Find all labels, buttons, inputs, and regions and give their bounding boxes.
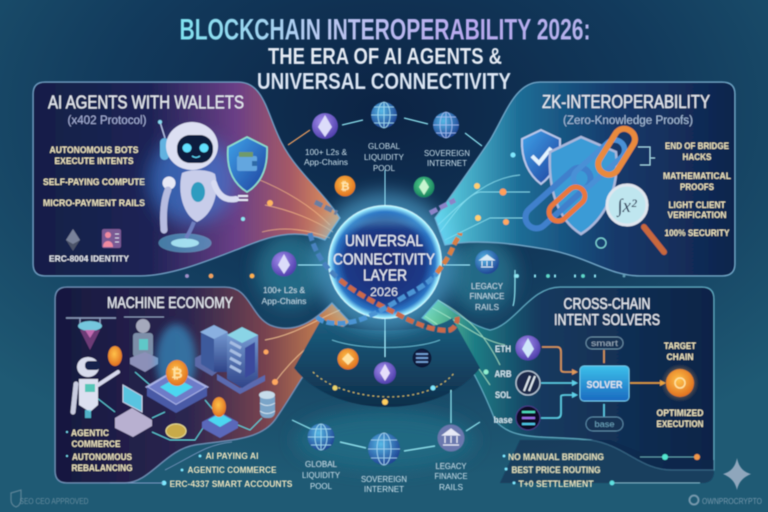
orb label [333, 233, 435, 299]
icon: target chain coin [661, 364, 699, 402]
title: UNIVERSAL CONNECTIVITY [257, 68, 511, 94]
icon: wallet shield [228, 137, 267, 192]
text block: ZK panel: VERIFICATION [668, 210, 727, 221]
orb label: LAYER [363, 268, 407, 284]
watermark: OwnProCrypto [690, 496, 762, 506]
text block: ZK panel [542, 92, 731, 239]
text block: ZK panel: MATHEMATICAL [663, 171, 731, 182]
icon: purple ethereum coin [374, 362, 396, 384]
background glow behind middle nodes [256, 232, 516, 470]
text block: machine economy: COMMERCE [72, 439, 120, 450]
text block: cross-chain panel: CROSS-CHAIN [564, 296, 650, 313]
icon: ethereum identity diamond [66, 229, 80, 251]
illustration: ZK shields, chain and magnifier [521, 125, 664, 252]
text block: machine economy: MACHINE ECONOMY [107, 295, 233, 312]
node: legacy finance rails (bottom) [434, 424, 468, 492]
energy streams [241, 152, 530, 385]
icon: ARB chain coin [516, 371, 540, 395]
text block: AI agents panel: AI AGENTS WITH WALLETS [48, 92, 244, 112]
text block: cross-chain panel: EXECUTION [656, 419, 704, 430]
node: global liquidity pool (bottom): GLOBAL [305, 459, 337, 469]
node: legacy finance rails (middle) [470, 250, 505, 312]
text block: AI agents panel: AUTONOMOUS BOTS [50, 145, 138, 156]
node: legacy finance rails (bottom): RAILS [439, 482, 463, 492]
icon: identity card [102, 229, 121, 248]
panel: cross-chain intent solvers [422, 287, 714, 470]
icon: green ethereum coin [414, 176, 434, 198]
node: 100+ L2s (middle): App-Chains [262, 296, 306, 306]
icon: ETH chain coin [516, 336, 540, 360]
solver box: SOLVER [586, 379, 623, 391]
text block: AI agents panel: ERC-8004 IDENTITY [49, 254, 129, 264]
solver box [580, 366, 629, 401]
watermark: SEO CEO approved: SEO CEO APPROVED [20, 497, 89, 506]
text block: cross-chain panel: ARB [494, 369, 512, 379]
node: legacy finance rails (bottom): LEGACY [436, 461, 467, 471]
text block: machine economy [66, 295, 292, 490]
node: global liquidity pool (top): LIQUIDITY [364, 152, 404, 162]
orb label: UNIVERSAL [345, 233, 423, 250]
pill: base [586, 417, 623, 431]
node: sovereign internet (bottom): INTERNET [364, 484, 404, 494]
pill: base: base [594, 420, 615, 429]
watermark: SEO CEO approved [11, 490, 89, 507]
text block: AI agents panel: MICRO-PAYMENT RAILS [43, 198, 145, 209]
node: 100+ L2s (middle) [262, 252, 306, 306]
node: sovereign internet (bottom) [361, 433, 407, 494]
node: sovereign internet (top): SOVEREIGN [424, 148, 470, 158]
text block: ZK panel: HACKS [682, 152, 712, 163]
illustration: machine economy network: ₿ [171, 365, 183, 381]
node: legacy finance rails (middle): RAILS [475, 302, 499, 312]
illustration: ZK shields, chain and magnifier: ∫x² [616, 196, 637, 218]
orb label: 2026 [370, 285, 398, 299]
text block: cross-chain panel: INTENT SOLVERS [554, 312, 660, 329]
text block: cross-chain panel: CHAIN [666, 352, 694, 362]
icon: bitcoin coin: ₿ [341, 181, 350, 193]
icon: solana coin [412, 348, 432, 368]
icon: binance coin [338, 348, 358, 370]
pill: smart: smart [591, 339, 619, 348]
pill: smart [586, 337, 623, 349]
panel: ZK-interoperability [435, 82, 735, 276]
chains across the orb [310, 200, 460, 330]
orb label: CONNECTIVITY [333, 252, 435, 268]
node: 100+ L2s (top): App-Chains [304, 157, 348, 167]
node: sovereign internet (top): INTERNET [427, 158, 467, 168]
node: 100+ L2s (middle): 100+ L2s & [263, 285, 305, 295]
panel: AI agents with wallets [33, 82, 340, 276]
text block: AI agents panel: EXECUTE INTENTS [54, 156, 134, 167]
text block: machine economy: AI PAYING AI [206, 451, 258, 462]
text block: cross-chain panel: TARGET [664, 341, 696, 351]
node: global liquidity pool (top): GLOBAL [368, 141, 400, 151]
text block: cross-chain panel: BEST PRICE ROUTING [512, 465, 600, 476]
node: global liquidity pool (top): POOL [373, 163, 395, 173]
text block: ZK panel: ZK-INTEROPERABILITY [542, 92, 710, 112]
text block: AI agents panel: SELF-PAYING COMPUTE [43, 177, 145, 188]
title: THE ERA OF AI AGENTS & [268, 43, 502, 69]
text block: ZK panel: PROOFS [680, 182, 714, 193]
text block: machine economy: ERC-4337 SMART ACCOUNTS [170, 479, 292, 490]
illustration: machine economy network [66, 317, 275, 440]
node: 100+ L2s (top) [304, 113, 348, 167]
node: 100+ L2s (top): 100+ L2s & [305, 147, 347, 157]
icon: bitcoin coin [334, 176, 356, 196]
central orb: universal connectivity layer [298, 170, 470, 357]
text block: machine economy: AUTONOMOUS [72, 452, 132, 463]
title [180, 14, 590, 94]
text block: cross-chain panel: ETH [495, 344, 511, 354]
title: BLOCKCHAIN INTEROPERABILITY 2026: [180, 14, 590, 46]
node: sovereign internet (bottom): SOVEREIGN [361, 474, 407, 484]
illustration: robot with wallet [148, 120, 248, 252]
node: global liquidity pool (bottom): POOL [310, 481, 332, 491]
illustration: dark ring below the orb [294, 318, 480, 407]
node: legacy finance rails (middle): FINANCE [470, 291, 505, 301]
text block: machine economy: AGENTIC [71, 428, 109, 439]
icon: four-point star [723, 458, 751, 490]
node: legacy finance rails (bottom): FINANCE [434, 471, 468, 481]
node: legacy finance rails (middle): LEGACY [471, 281, 503, 291]
text block: cross-chain panel [494, 296, 704, 490]
text block: ZK panel: 100% SECURITY [664, 228, 730, 239]
solver flow arrows [541, 347, 666, 418]
text block: ZK panel: (Zero-Knowledge Proofs) [563, 115, 693, 127]
node: global liquidity pool (bottom): LIQUIDITY [302, 470, 340, 480]
text block: ZK panel: LIGHT CLIENT [668, 200, 726, 211]
text block: cross-chain panel: OPTIMIZED [656, 408, 704, 419]
text block: cross-chain panel: T+0 SETTLEMENT [518, 479, 594, 490]
text block: cross-chain panel: SOL [495, 390, 511, 400]
network arrows [288, 118, 600, 451]
text block: machine economy: REBALANCING [72, 463, 132, 474]
text block: ZK panel: END OF BRIDGE [665, 141, 729, 152]
text block: AI agents panel [43, 92, 244, 264]
icon: SOL chain coin [516, 406, 540, 430]
node: sovereign internet (top) [424, 112, 470, 168]
text block: AI agents panel: (x402 Protocol) [68, 115, 147, 127]
panel: cross-chain lower band [500, 440, 714, 483]
node: global liquidity pool (bottom) [302, 424, 340, 491]
panel: machine economy [55, 287, 350, 483]
text block: cross-chain panel: base [494, 415, 512, 425]
node: global liquidity pool (top) [364, 102, 404, 173]
connector dots [110, 274, 700, 486]
text block: machine economy: AGENTIC COMMERCE [188, 465, 276, 476]
text block: cross-chain panel: NO MANUAL BRIDGING [508, 452, 604, 463]
